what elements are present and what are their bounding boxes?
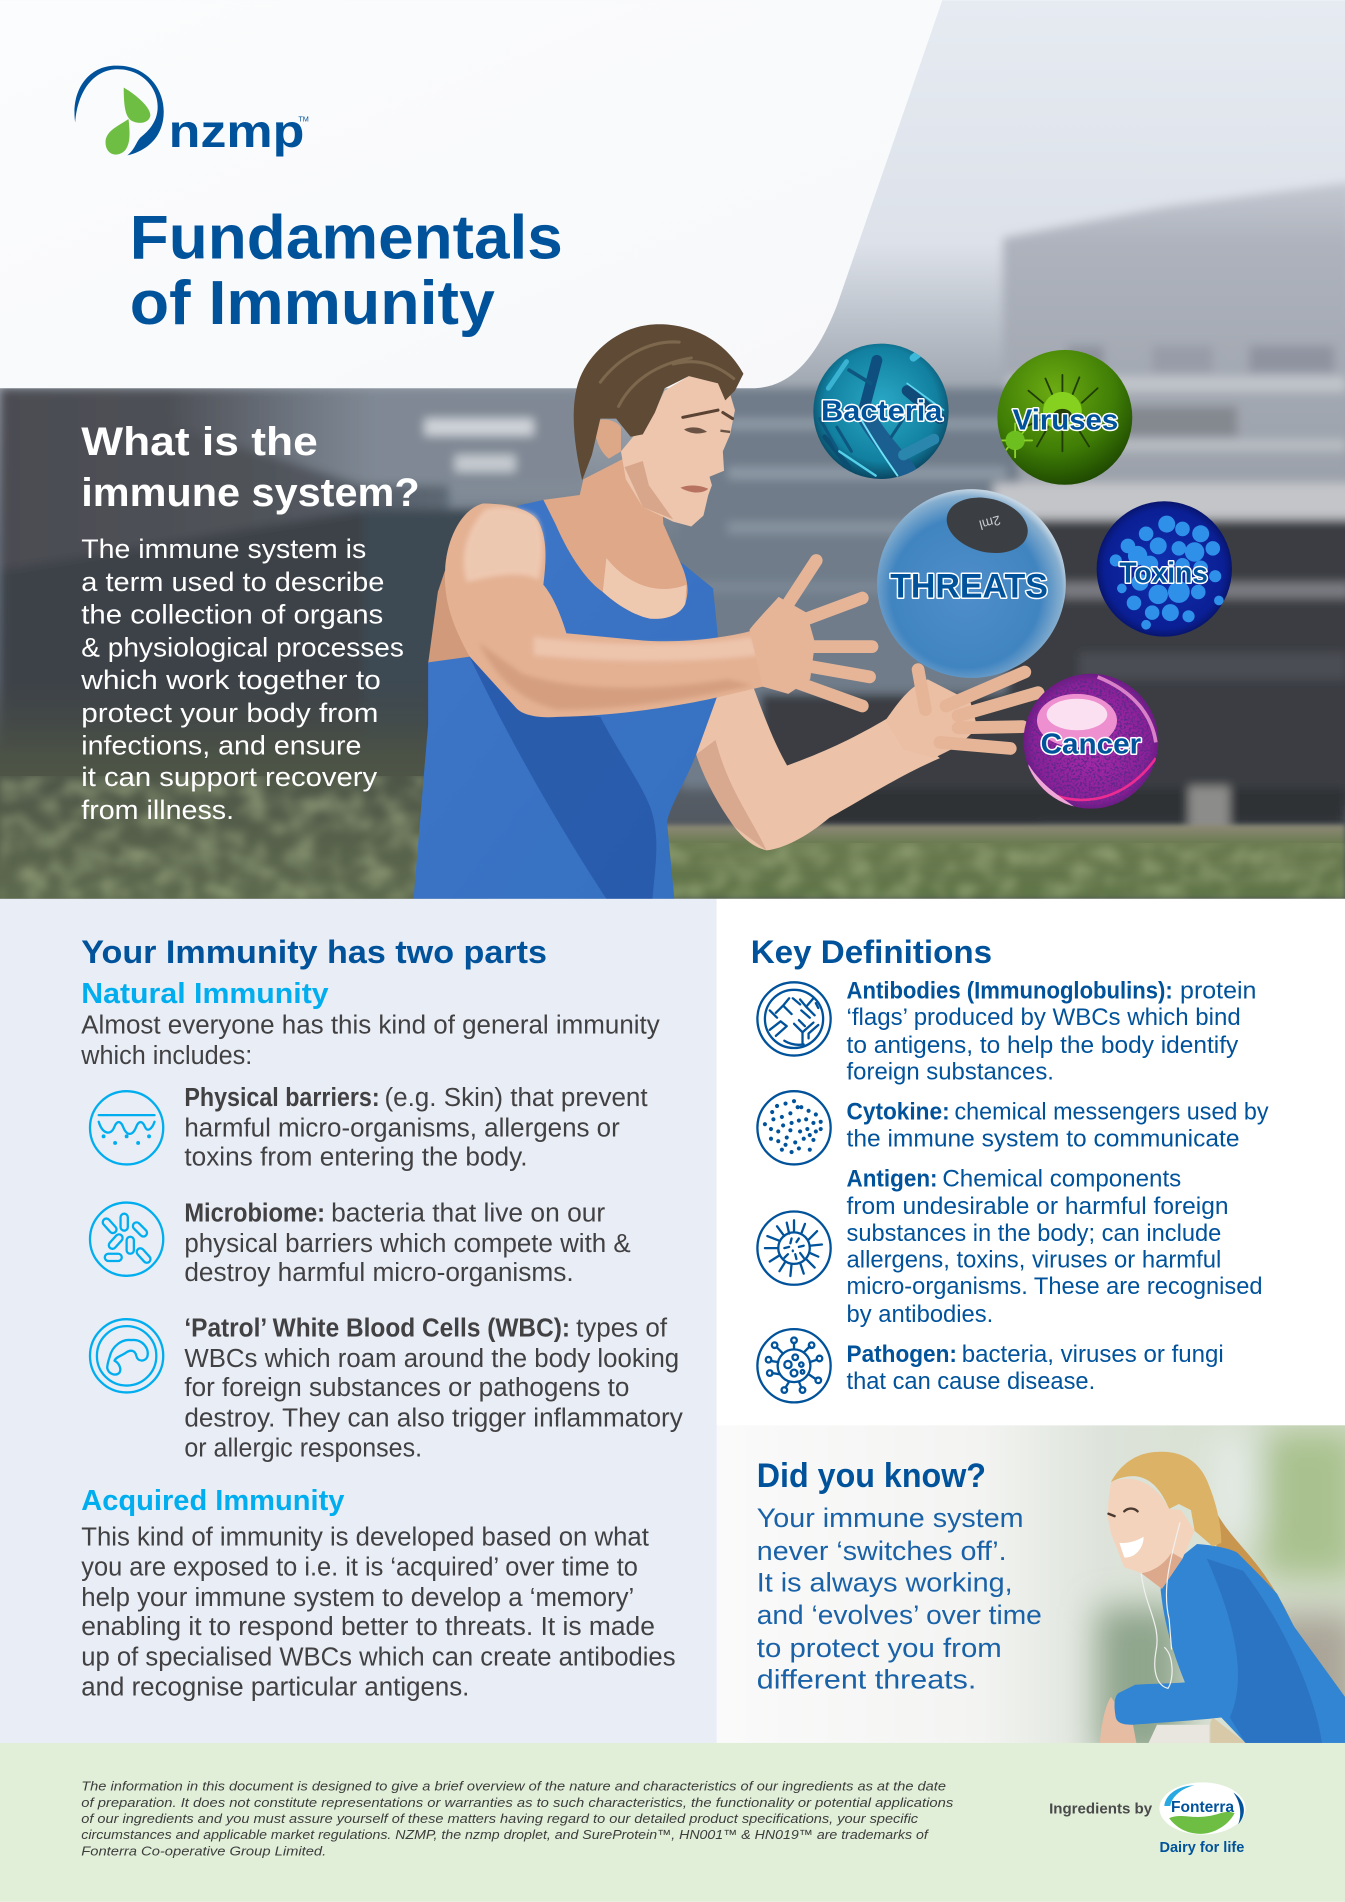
text: acquired immunity: help your immune system to develop a ‘memory’ (81, 1584, 634, 1612)
text: antigen: from undesirable or harmful foreign (847, 1194, 1229, 1220)
subheading: acquired immunity: Acquired Immunity (81, 1485, 345, 1517)
text: did you know body: never ‘switches off’. (757, 1535, 1007, 1566)
icon: pathogen (757, 1329, 831, 1402)
label: Toxins: Toxins (1119, 557, 1208, 589)
text: did you know body: It is always working, (757, 1566, 1013, 1597)
text: cytokine: the immune system to communicate (847, 1126, 1239, 1152)
heading: what is the immune system: immune system? (81, 471, 420, 515)
ponytail (1216, 1515, 1290, 1620)
label: Cancer: Cancer (1041, 728, 1141, 760)
text: disclaimer: of our ingredients and you must assure yourself of these matters having regard to our detailed product specifications, your specific (81, 1811, 918, 1826)
text: immune system description: a term used to describe (81, 566, 384, 597)
blue sweater (1115, 1544, 1345, 1743)
icon: antigen (757, 1212, 831, 1285)
text: cytokine: chemical messengers used by (954, 1100, 1269, 1126)
icon: white blood cell (90, 1319, 163, 1392)
text: physical barriers: harmful micro-organisms, allergens or (184, 1115, 620, 1143)
back skin (428, 570, 473, 664)
text: antigen (847, 1166, 1263, 1328)
text: natural immunity intro: which includes: (80, 1042, 252, 1070)
logo: fonterra (1159, 1782, 1246, 1835)
text: immune system description: from illness. (81, 794, 234, 825)
logo: nzmp (74, 66, 309, 157)
text: did you know body (757, 1502, 1042, 1694)
heading: key definitions: Key Definitions (751, 934, 992, 970)
text: antibodies (847, 978, 1256, 1086)
footer band (0, 1743, 1345, 1902)
text: acquired immunity (81, 1523, 676, 1702)
text: antigen: Chemical components (942, 1166, 1181, 1192)
text: patrol white blood cells: destroy. They can also trigger inflammatory (184, 1404, 683, 1432)
label: Bacteria: Bacteria (821, 395, 944, 427)
text: patrol white blood cells: or allergic responses. (184, 1435, 422, 1463)
earphones (1141, 1522, 1180, 1688)
text: antibodies: foreign substances. (847, 1060, 1054, 1086)
text: antibodies: ‘flags’ produced by WBCs which bind (847, 1005, 1241, 1031)
near arm (445, 503, 807, 717)
text: immune system description: which work together to (80, 664, 381, 695)
text: microbiome: destroy harmful micro-organisms. (184, 1259, 574, 1287)
text: antibodies: Antibodies (Immunoglobulins): (847, 978, 1173, 1004)
text: cytokine: Cytokine: (847, 1100, 950, 1126)
text: dairy for life: Dairy for life (1159, 1839, 1244, 1856)
railing (1149, 1725, 1209, 1743)
text: patrol white blood cells: ‘Patrol’ White Blood Cells (WBC): (184, 1315, 570, 1343)
neck and chest (543, 455, 688, 619)
text: pathogen: Pathogen: (847, 1342, 957, 1368)
sphere: threats ball (877, 489, 1066, 678)
sphere: cancer (1024, 674, 1158, 809)
man face (594, 376, 735, 527)
icon: skin barrier (90, 1091, 163, 1164)
text: immune system description: protect your body from (81, 697, 378, 728)
white title panel (0, 0, 942, 388)
text: pathogen: bacteria, viruses or fungi (962, 1342, 1224, 1368)
sphere: viruses (997, 350, 1132, 485)
label: THREATS: THREATS (890, 567, 1048, 605)
title (130, 203, 563, 338)
hair (1111, 1452, 1221, 1546)
text: acquired immunity: you are exposed to i.e. it is ‘acquired’ over time to (81, 1554, 638, 1582)
man hair (574, 324, 743, 480)
panel: did you know (757, 1425, 1345, 1743)
text: microbiome: bacteria that live on our (331, 1199, 606, 1227)
text: disclaimer: of preparation. It does not constitute representations or warranties as to such characteristics, the functionality or potential applications (81, 1795, 954, 1810)
hero photo background (0, 0, 1345, 899)
text: disclaimer: circumstances and applicable market regulations. NZMP, the nzmp droplet, and SureProtein™, HN001™ & HN019™ are trademarks of (81, 1827, 929, 1842)
text: patrol white blood cells: for foreign substances or pathogens to (184, 1374, 629, 1402)
text: immune system description: & physiological processes (81, 631, 404, 662)
text: pathogen: that can cause disease. (847, 1369, 1095, 1395)
woman leaning on railing (1100, 1452, 1345, 1743)
text: did you know body: different threats. (757, 1663, 976, 1694)
text: patrol white blood cells: WBCs which roam around the body looking (184, 1345, 679, 1373)
heading: your immunity: Your Immunity has two parts (81, 934, 547, 970)
sphere: toxins (1097, 501, 1232, 637)
text: acquired immunity: This kind of immunity is developed based on what (81, 1523, 649, 1551)
text: antigen: Antigen: (847, 1166, 937, 1192)
icon: microbiome (90, 1203, 163, 1276)
man upper hand (750, 560, 872, 706)
icon: antibodies (757, 982, 831, 1056)
text: antigen: micro-organisms. These are recognised (847, 1274, 1263, 1300)
text: antibodies: protein (1180, 978, 1256, 1004)
text: antibodies: to antigens, to help the body identify (847, 1033, 1238, 1059)
title: of Immunity (130, 269, 495, 338)
text: patrol white blood cells (184, 1315, 683, 1463)
text: antigen: substances in the body; can include (847, 1221, 1221, 1247)
panel: key definitions (717, 899, 1345, 1425)
text: disclaimer (81, 1778, 954, 1859)
text: acquired immunity: enabling it to respond better to threats. It is made (81, 1613, 655, 1641)
icon: cytokine (757, 1091, 831, 1164)
text: antigen: allergens, toxins, viruses or harmful (847, 1248, 1221, 1274)
text: immune system description: it can support recovery (81, 761, 378, 792)
heading: what is the immune system (81, 420, 420, 515)
man lower hand (885, 670, 1038, 758)
text: antigen: by antibodies. (847, 1302, 993, 1328)
text: did you know body: to protect you from (757, 1632, 1002, 1663)
logo: nzmp: TM (298, 114, 309, 123)
subheading: natural immunity: Natural Immunity (81, 978, 330, 1010)
sphere: bacteria (813, 344, 949, 479)
man catching ball (414, 324, 1038, 899)
text: physical barriers: toxins from entering the body. (184, 1144, 528, 1172)
text: cytokine (847, 1100, 1269, 1152)
text: immune system description: infections, and ensure (81, 730, 361, 761)
text: physical barriers: Physical barriers: (184, 1084, 380, 1112)
text: natural immunity intro: Almost everyone has this kind of general immunity (81, 1011, 660, 1039)
text: disclaimer: The information in this document is designed to give a brief overview of the nature and characteristics of our ingredients as at the date (81, 1778, 946, 1793)
text: immune system description: The immune system is (81, 533, 366, 564)
hand (1100, 1697, 1136, 1743)
text: disclaimer: Fonterra Co-operative Group Limited. (81, 1844, 326, 1859)
heading: what is the immune system: What is the (81, 420, 318, 464)
logo: fonterra: Fonterra (1171, 1799, 1234, 1816)
heading: did you know: Did you know? (757, 1457, 986, 1495)
logo: nzmp: nzmp (169, 105, 304, 157)
text: acquired immunity: and recognise particular antigens. (81, 1674, 469, 1702)
face and neck (1108, 1479, 1195, 1589)
text: physical barriers (184, 1084, 648, 1172)
blue tank top (414, 500, 718, 899)
far arm (696, 687, 940, 850)
panel: your immunity has two parts (0, 899, 717, 1743)
text: physical barriers: (e.g. Skin) that prevent (384, 1084, 648, 1112)
text: acquired immunity: up of specialised WBCs which can create antibodies (81, 1643, 676, 1671)
text: ingredients by: Ingredients by (1049, 1800, 1153, 1817)
text: did you know body: Your immune system (757, 1502, 1024, 1533)
text: immune system description: the collection of organs (81, 599, 383, 630)
text: microbiome (184, 1199, 631, 1287)
ball marking: 2ml (978, 512, 1002, 533)
text: natural immunity intro (80, 1011, 660, 1070)
text: microbiome: Microbiome: (184, 1199, 325, 1227)
text: microbiome: physical barriers which compete with & (184, 1230, 631, 1258)
label: Viruses: Viruses (1013, 404, 1118, 436)
text: patrol white blood cells: types of (576, 1315, 668, 1343)
title: Fundamentals (130, 203, 563, 272)
text: did you know body: and ‘evolves’ over time (757, 1599, 1042, 1630)
text: immune system description (80, 533, 404, 825)
text: pathogen (847, 1342, 1224, 1395)
